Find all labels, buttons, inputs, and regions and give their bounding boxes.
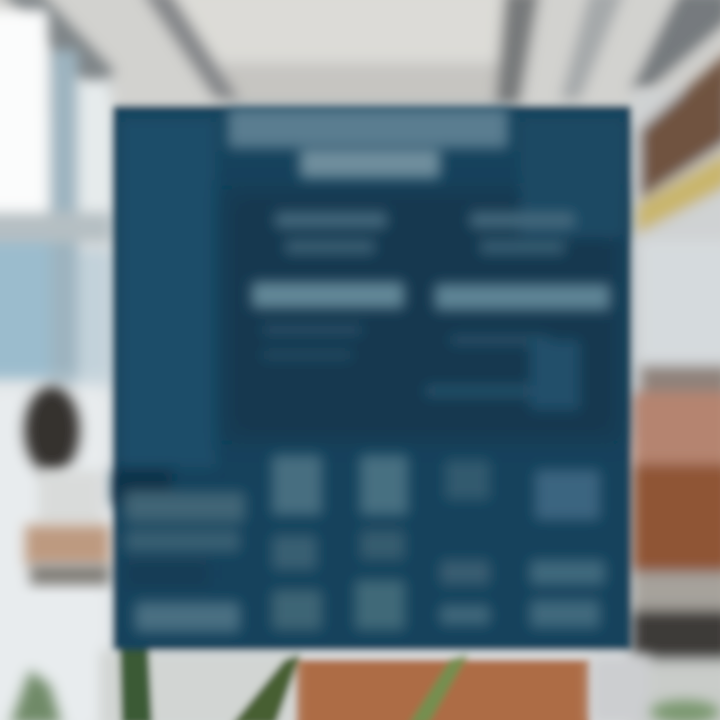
panel: dark blue board (112, 106, 631, 650)
heading: title band (228, 108, 508, 148)
text block: left card (252, 212, 404, 360)
table: lower data grid (112, 455, 605, 632)
heading: subtitle band (300, 148, 440, 178)
ceiling (0, 0, 720, 115)
floor and plants (10, 645, 720, 720)
panel: left column (120, 118, 216, 468)
icon: person at the left (24, 386, 110, 585)
panel: centre dark area (225, 190, 620, 440)
panel: right top block (520, 118, 625, 238)
text block: right card (425, 212, 610, 410)
left window (0, 10, 112, 390)
right side interior (632, 50, 720, 720)
left lower white area (0, 385, 112, 720)
